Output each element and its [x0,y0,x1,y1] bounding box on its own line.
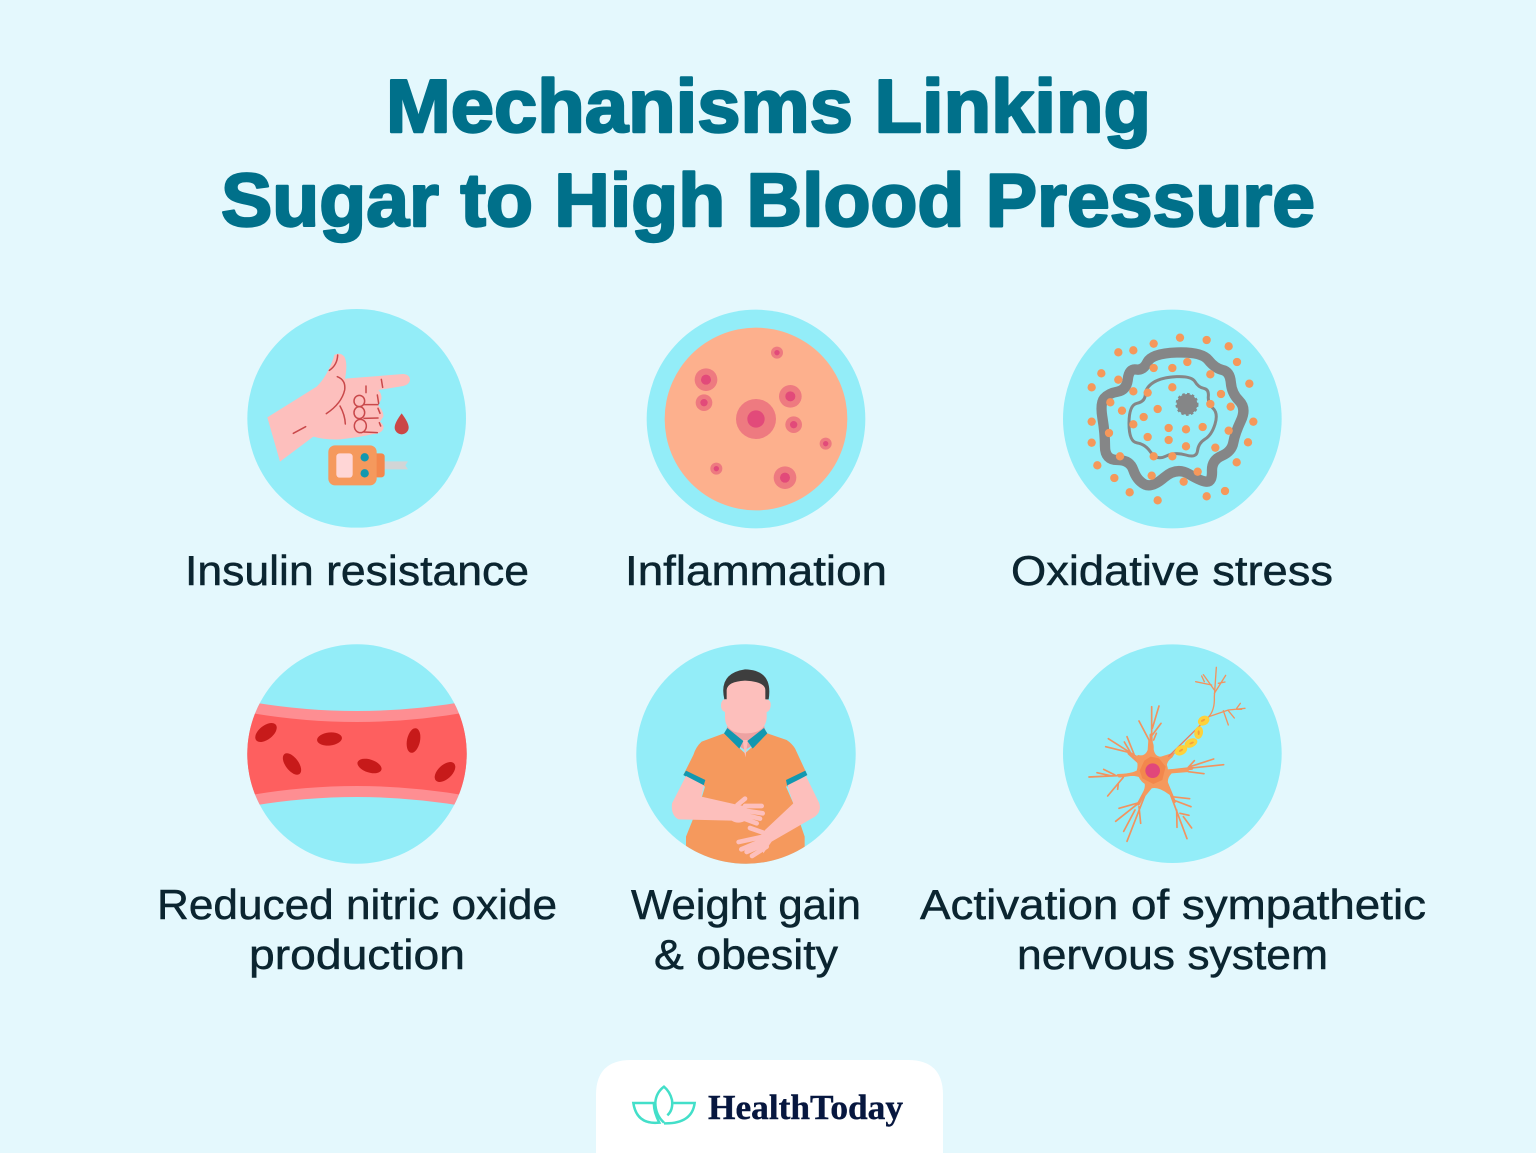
panel: inflammation [625,310,887,594]
title: Mechanisms Linking [386,64,1151,148]
logo card [596,1060,943,1153]
icon: hand and glucose meter [247,309,466,528]
label: activation of sympathetic nervous system: nervous system [1017,931,1328,978]
panel: weight gain [631,644,861,978]
head [721,681,771,733]
arms [672,776,747,823]
icon: blood drop [395,413,409,434]
icon: inflamed skin [647,310,865,528]
icon: blood vessel [240,644,474,864]
label: weight gain and obesity [631,881,861,978]
label: inflammation: Inflammation [625,547,887,594]
cell body [1117,740,1189,797]
icon: damaged cell [1063,310,1282,528]
panel: sympathetic nervous system [920,644,1426,978]
neck [725,726,766,750]
hair [723,669,769,699]
icon: neuron [1063,644,1282,863]
label: activation of sympathetic nervous system [920,881,1426,978]
icon: glucose meter [328,445,408,485]
label: weight gain and obesity: & obesity [654,931,838,978]
panel: insulin resistance [185,309,529,594]
panel: reduced nitric oxide [157,644,557,978]
title: Sugar to High Blood Pressure [221,158,1315,242]
label: weight gain and obesity: Weight gain [631,881,861,928]
axon [1168,717,1208,757]
label: reduced nitric oxide production: Reduced nitric oxide [157,881,557,928]
title [221,64,1315,242]
label: reduced nitric oxide production [157,881,557,978]
panel: oxidative stress [1011,310,1333,594]
label: activation of sympathetic nervous system: Activation of sympathetic [920,881,1426,928]
icon: lotus logo [633,1087,695,1123]
label: oxidative stress: Oxidative stress [1011,547,1333,594]
label: insulin resistance: Insulin resistance [185,547,529,594]
shirt [683,733,807,870]
icon: man holding belly [636,644,856,870]
label: reduced nitric oxide production: production [249,931,465,978]
logo wordmark: HealthToday [708,1088,904,1127]
